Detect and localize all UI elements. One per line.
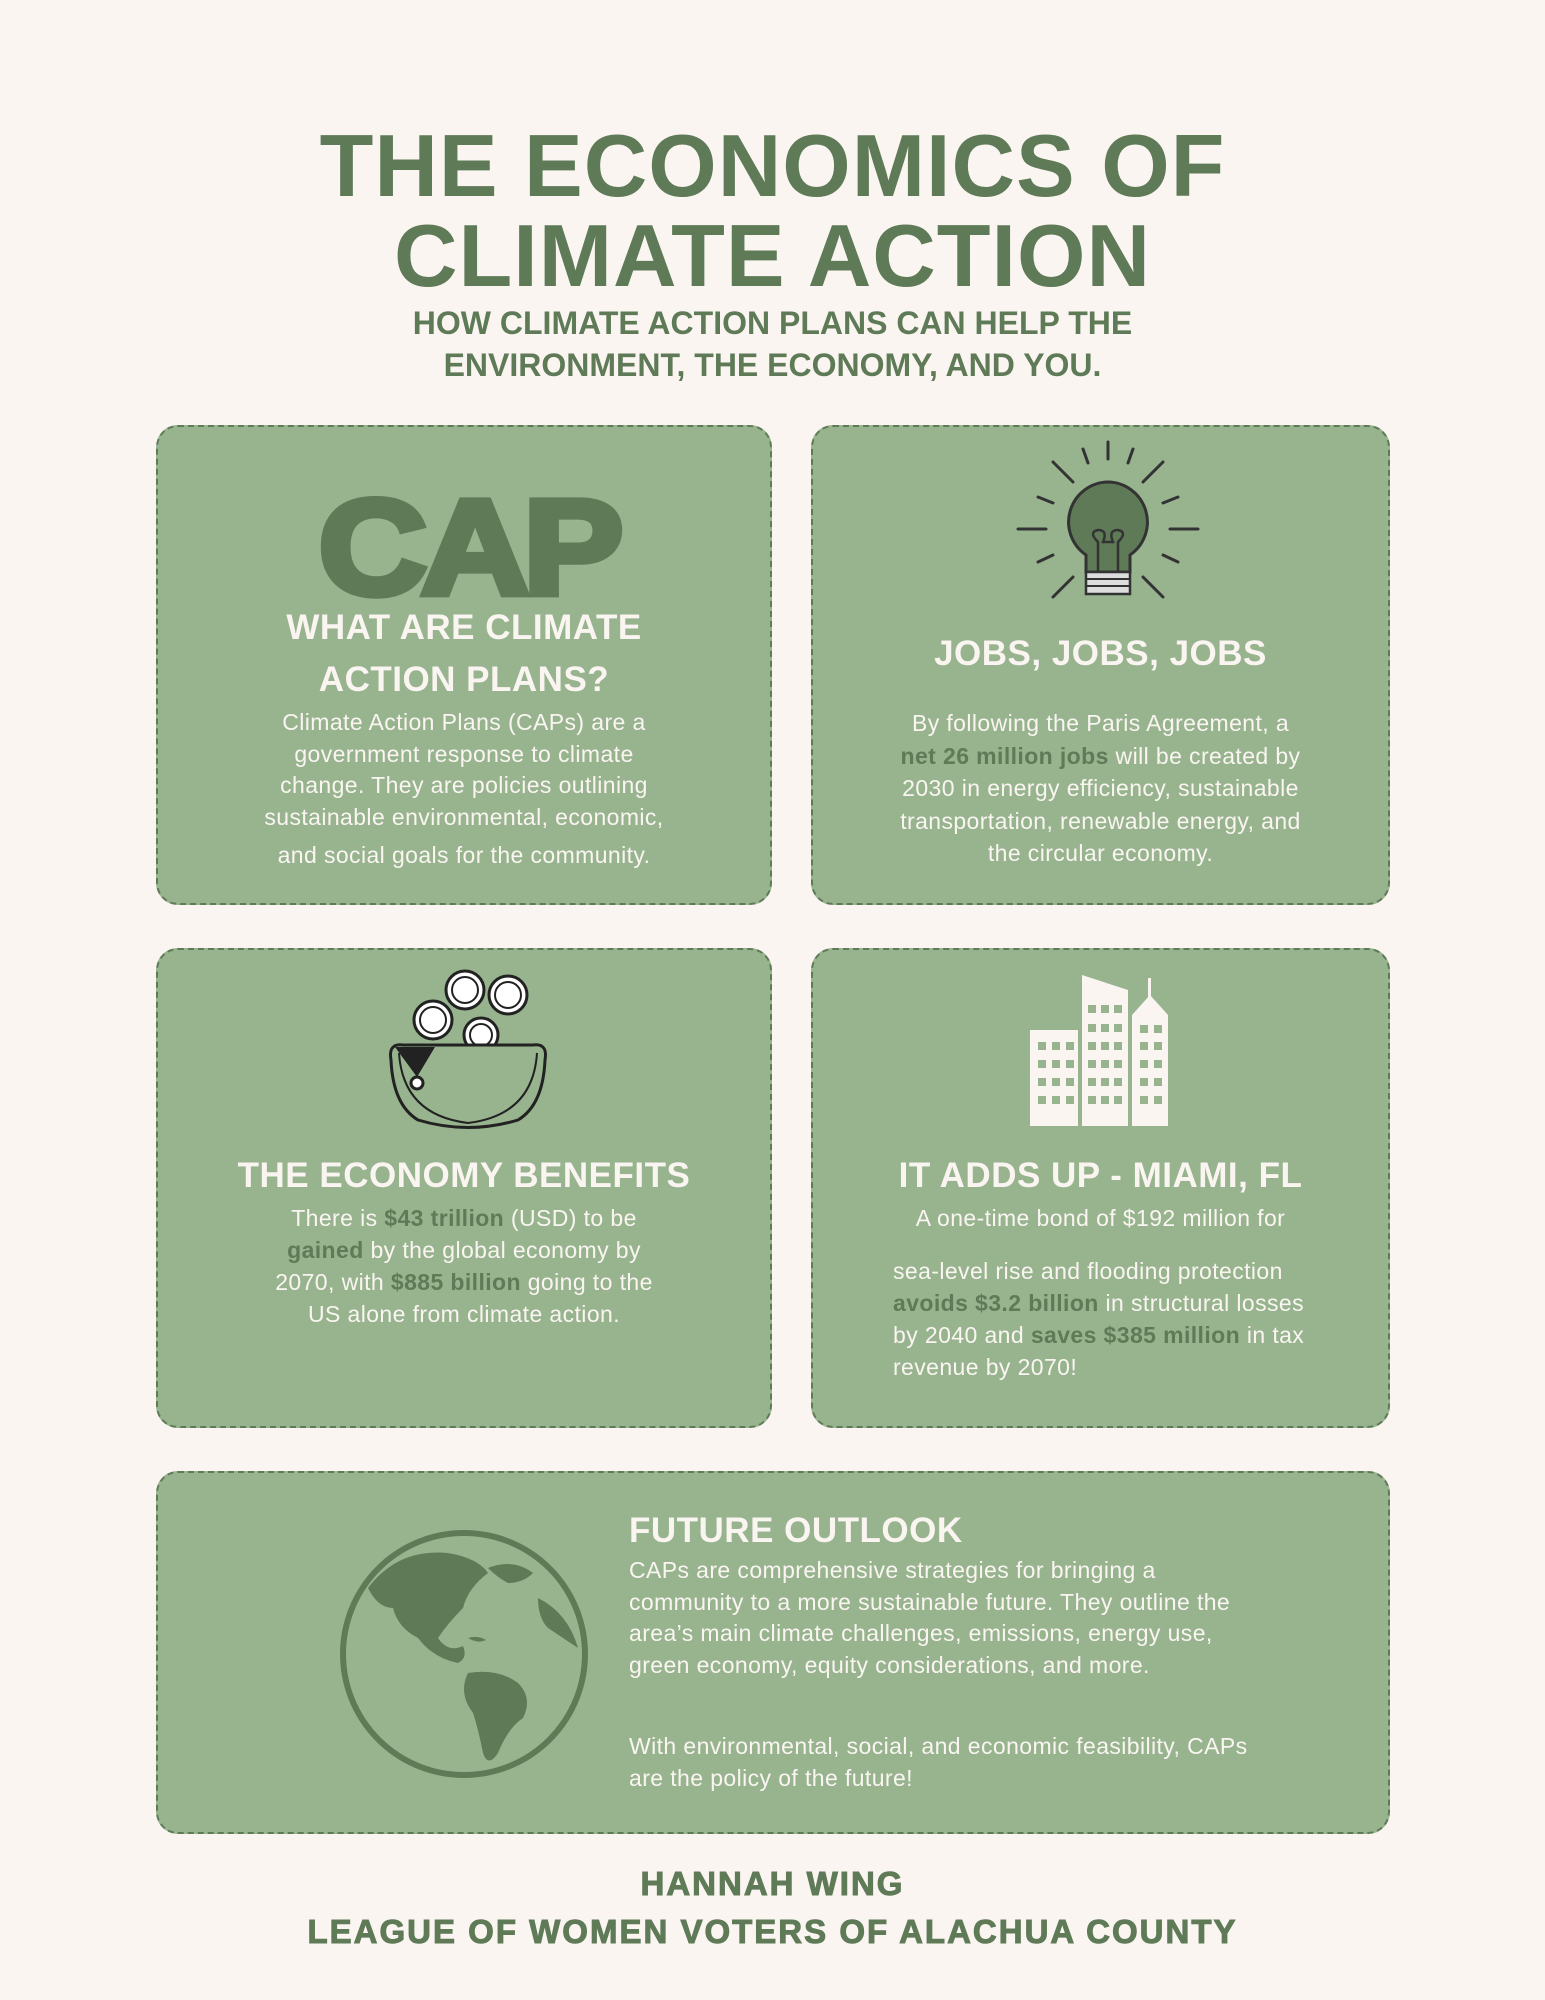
heading [286,608,642,699]
body text: area’s main climate challenges, emissions, energy use, [629,1620,1213,1646]
body text continued: avoids $3.2 billion in structural losses [893,1290,1304,1316]
body text: and social goals for the community. [278,842,650,868]
footer: author [307,1865,1238,1950]
body text: government response to climate [294,740,634,766]
body text continued [893,1258,1304,1380]
title: CLIMATE ACTION [394,206,1151,305]
body text: change. They are policies outlining [280,772,648,798]
body text continued: revenue by 2070! [893,1354,1077,1380]
body text [900,710,1301,866]
title: THE ECONOMICS OF [320,116,1225,215]
icon: light bulb [1016,440,1200,599]
body text: 2070, with $885 billion going to the [275,1269,653,1295]
body text continued: sea-level rise and flooding protection [893,1258,1283,1284]
body text: green economy, equity considerations, and more. [629,1652,1150,1678]
panel: Miami [811,948,1390,1428]
closing text: are the policy of the future! [629,1764,913,1790]
heading: ACTION PLANS? [319,660,609,699]
closing text [629,1733,1247,1791]
body text: 2030 in energy efficiency, sustainable [902,775,1299,801]
body text: By following the Paris Agreement, a [912,710,1289,736]
subtitle: ENVIRONMENT, THE ECONOMY, AND YOU. [444,347,1101,383]
body text: US alone from climate action. [308,1301,620,1327]
body text: transportation, renewable energy, and [900,808,1301,834]
body text [275,1205,653,1327]
body text continued: by 2040 and saves $385 million in tax [893,1322,1304,1348]
icon: globe [340,1530,588,1778]
body text: There is $43 trillion (USD) to be [291,1205,637,1231]
closing text: With environmental, social, and economic feasibility, CAPs [629,1733,1247,1759]
icon: coin purse [389,970,547,1129]
heading: IT ADDS UP - MIAMI, FL [899,1156,1302,1195]
body text: net 26 million jobs will be created by [901,742,1300,768]
body text: sustainable environmental, economic, [264,804,664,830]
body text [264,709,664,868]
heading: FUTURE OUTLOOK [629,1511,963,1550]
heading: WHAT ARE CLIMATE [286,608,642,647]
body text: community to a more sustainable future. They outline the [629,1588,1230,1614]
heading: JOBS, JOBS, JOBS [934,634,1267,673]
heading: THE ECONOMY BENEFITS [238,1156,690,1195]
title [320,116,1225,305]
panel: future outlook [156,1471,1390,1834]
body text: Climate Action Plans (CAPs) are a [282,709,646,735]
panel: jobs [811,425,1390,905]
body text: gained by the global economy by [287,1237,641,1263]
body text: A one-time bond of $192 million for [916,1205,1285,1231]
body text: CAPs are comprehensive strategies for bringing a [629,1557,1156,1583]
panel: what are CAPs [156,425,772,905]
footer: author: HANNAH WING [640,1865,904,1902]
body text [629,1557,1230,1678]
panel: economy benefits [156,948,772,1428]
footer: author: LEAGUE OF WOMEN VOTERS OF ALACHUA COUNTY [307,1913,1238,1950]
subtitle [413,305,1132,383]
subtitle: HOW CLIMATE ACTION PLANS CAN HELP THE [413,305,1132,341]
icon: CAP lettering: CAP [319,471,617,623]
icon: buildings [1030,975,1168,1126]
body text: the circular economy. [988,840,1213,866]
